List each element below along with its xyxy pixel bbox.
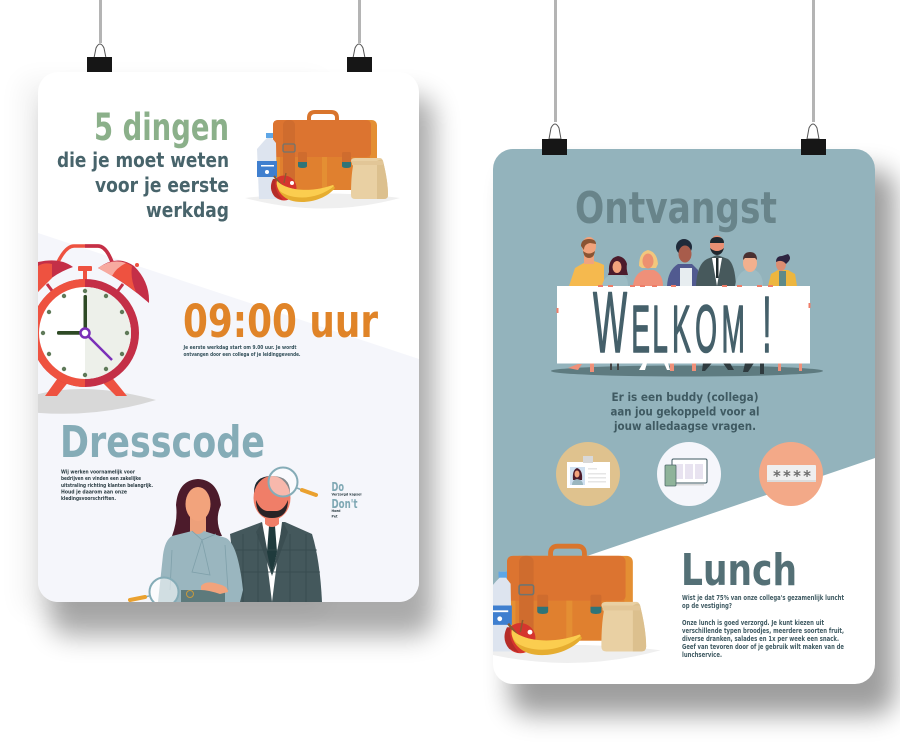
person 5 (696, 236, 736, 286)
text: lunch (682, 594, 845, 659)
banner: ! (762, 280, 772, 370)
person 2 (602, 256, 628, 286)
text: buddy (610, 390, 760, 433)
clip 4 (801, 0, 826, 155)
icon: devices (657, 442, 721, 506)
text: starttijd: ontvangen door een collega of je leidinggevende. (184, 352, 301, 358)
heading: 5 dingen: werkdag (146, 198, 229, 222)
heading: 5 dingen: 5 dingen (94, 106, 229, 149)
banner: W (593, 274, 628, 370)
banner: ELKOM (631, 291, 745, 366)
text: dresscode: kledingsvoorschriften. (61, 496, 116, 502)
hanging wires and binder clips (87, 0, 826, 155)
person 1 (569, 237, 604, 286)
icon: magnifier on man (268, 468, 316, 496)
text: do and don't: Hoed (332, 509, 341, 513)
clip 1 (87, 0, 112, 72)
banner (556, 285, 810, 364)
text: lunch: diverse dranken, salades en 1x per week een snack. (682, 635, 839, 643)
text: dresscode (61, 470, 153, 502)
panel: poster eerste werkdag (20, 72, 419, 606)
text: buddy: jouw alledaagse vragen. (613, 419, 756, 433)
illustration: woman with blouse (158, 479, 243, 602)
icon: password: **** (773, 467, 811, 485)
text: dresscode: uitstraling richting klanten belangrijk. (61, 483, 153, 489)
heading: 5 dingen: voor je eerste (95, 173, 229, 197)
text: lunch: Geef van tevoren door of je gebruik wilt maken van de (682, 643, 844, 651)
icon: magnifier on woman (130, 578, 178, 606)
text: starttijd (183, 345, 301, 358)
text: do and don't: Pet (332, 514, 338, 518)
text: dresscode: Wij werken voornamelijk voor (61, 470, 135, 476)
heading: Ontvangst: Ontvangst (575, 183, 777, 234)
icon: password (759, 442, 823, 506)
illustration: man in suit (230, 476, 322, 602)
text: buddy: aan jou gekoppeld voor al (610, 404, 760, 418)
heading: 5 dingen (57, 106, 229, 222)
text: lunch: lunchservice. (682, 651, 722, 659)
icon: badge (556, 442, 620, 506)
person 6 (735, 252, 763, 286)
clip 3 (542, 0, 567, 155)
icon: briefcase with lunch (245, 112, 400, 208)
panel: poster ontvangst en lunch (473, 149, 875, 684)
text: do and don't (332, 480, 362, 518)
heading: 5 dingen: die je moet weten (57, 148, 229, 172)
text: lunch: op de vestiging? (682, 602, 732, 610)
icon: briefcase with lunch (473, 546, 661, 663)
person 4 (667, 239, 698, 286)
heading: Dresscode: Dresscode (60, 417, 265, 468)
heading: Lunch: Lunch (681, 545, 797, 596)
text: do and don't: Do (332, 480, 344, 494)
person 3 (633, 250, 663, 286)
person 7 (768, 254, 797, 286)
text: do and don't: Verzorgd kapsel (332, 492, 362, 496)
clip 2 (347, 0, 372, 72)
text: dresscode: Houd je daarom aan onze (61, 490, 127, 496)
heading: 09:00 uur: 09:00 uur (183, 295, 379, 348)
text: starttijd: Je eerste werkdag start om 9.00 uur. Je wordt (183, 345, 297, 351)
text: lunch: verschillende typen broodjes, meerdere soorten fruit, (682, 627, 844, 635)
text: do and don't: Don't (332, 497, 358, 511)
illustration: people holding banner (551, 236, 823, 376)
text: buddy: Er is een buddy (collega) (612, 390, 758, 404)
text: lunch: Wist je dat 75% van onze collega's gezamenlijk luncht (682, 594, 845, 602)
text: lunch: Onze lunch is goed verzorgd. Je kunt kiezen uit (682, 619, 825, 627)
text: dresscode: bedrijven en vinden een zakelijke (61, 476, 141, 482)
icon: alarm clock (38, 244, 156, 414)
